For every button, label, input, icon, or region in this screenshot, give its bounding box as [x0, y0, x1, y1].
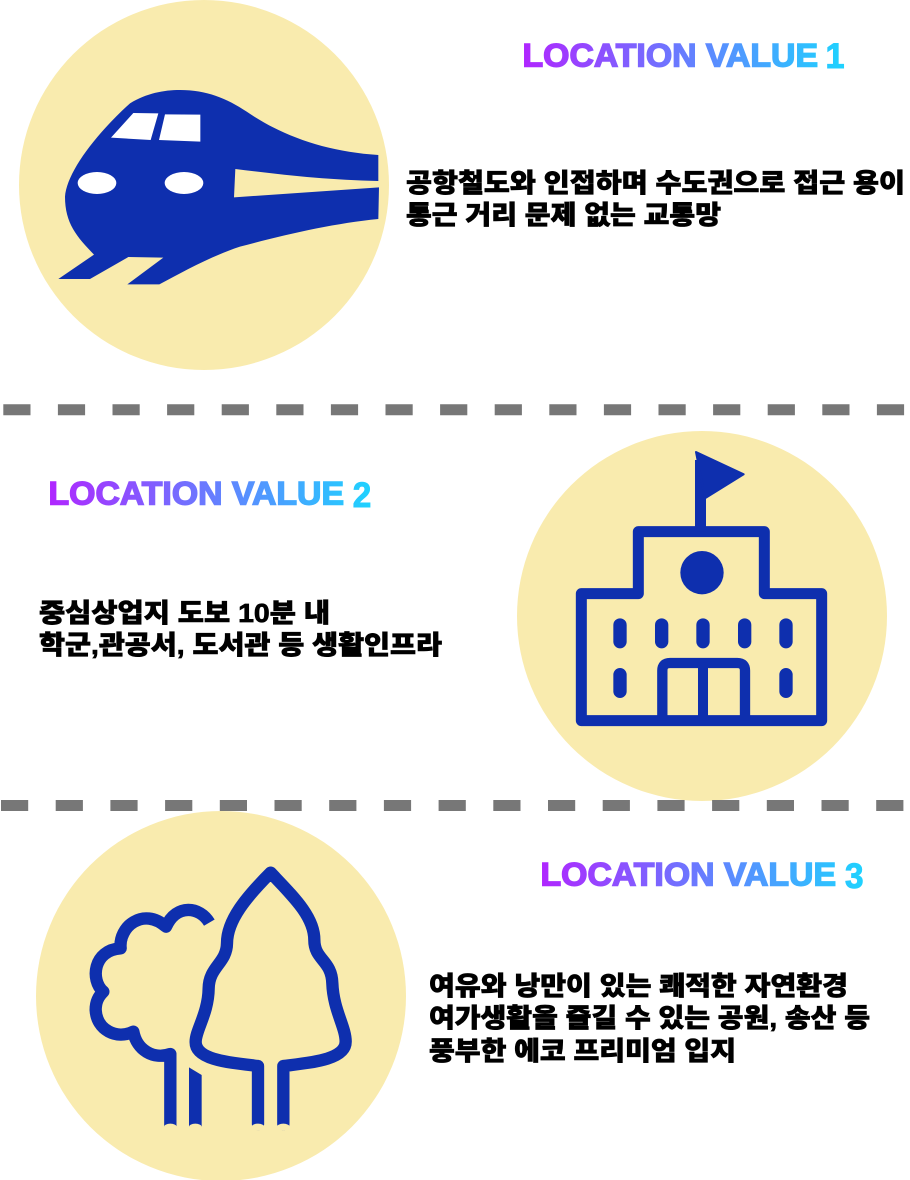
panel: location value 1	[19, 0, 905, 370]
text block: downtown description: 중심상업지 도보 10분 내	[39, 598, 330, 628]
text block: nature description: 풍부한 에코 프리미엄 입지	[429, 1036, 736, 1066]
text block: downtown description: 학군,관공서, 도서관 등 생활인프라	[39, 630, 442, 660]
divider: bottom dashed line	[1, 800, 910, 811]
panel: location value 3	[36, 811, 870, 1180]
icon: two trees	[96, 873, 346, 1130]
circle: train backdrop	[19, 0, 389, 370]
panel: location value 2	[39, 431, 887, 801]
divider: top dashed line	[3, 404, 910, 415]
text block: downtown description	[39, 598, 442, 660]
heading: location value 1: 1	[826, 37, 844, 76]
text block: nature description: 여유와 낭만이 있는 쾌적한 자연환경	[429, 971, 848, 1001]
circle: school backdrop	[517, 431, 887, 801]
heading: location value 2: LOCATION VALUE	[48, 475, 344, 511]
heading: location value 3: LOCATION VALUE	[540, 856, 836, 892]
text block: transport description: 공항철도와 인접하며 수도권으로 접근 용이	[406, 168, 905, 198]
heading: location value 3: 3	[845, 857, 864, 896]
icon: train	[58, 90, 379, 284]
heading: location value 1: LOCATION VALUE	[522, 37, 818, 73]
text block: transport description: 통근 거리 문제 없는 교통망	[406, 200, 721, 230]
icon: school building with flag	[581, 452, 822, 721]
text block: nature description: 여가생활을 즐길 수 있는 공원, 송산 등	[429, 1003, 870, 1033]
text block: nature description	[429, 971, 870, 1066]
text block: transport description	[406, 168, 905, 230]
heading: location value 2: 2	[353, 476, 371, 515]
circle: trees backdrop	[36, 811, 406, 1180]
